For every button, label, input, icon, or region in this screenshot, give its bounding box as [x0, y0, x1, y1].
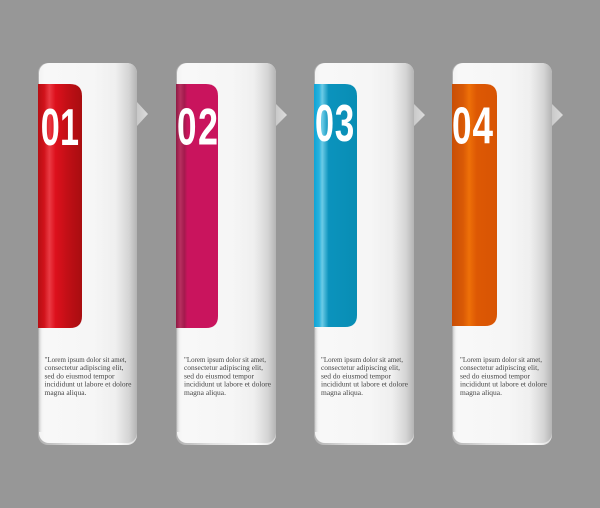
number: 01: 1 [60, 99, 79, 157]
text: step 02 [184, 355, 272, 397]
card: step 01 [38, 63, 137, 445]
ribbon: step 01 [38, 84, 82, 328]
text: step 02: incididunt ut labore et dolore [184, 380, 272, 388]
text: step 02: sed do eiusmod tempor [184, 372, 255, 380]
text: step 02: magna aliqua. [184, 388, 226, 397]
number: 02: 2 [198, 98, 218, 156]
card: step 02 [176, 63, 276, 445]
ribbon: step 04 [452, 84, 497, 326]
arrow: step 02 [275, 103, 287, 127]
text: step 03 [321, 355, 409, 397]
number: 04: 0 [452, 98, 472, 156]
number: 03: 3 [335, 95, 354, 153]
text: step 03: consectetur adipiscing elit, [321, 363, 400, 372]
panel: step 02 [176, 63, 287, 445]
text: step 04: "Lorem ipsum dolor sit amet, [460, 355, 542, 364]
text: step 01: consectetur adipiscing elit, [44, 363, 124, 372]
text: step 02: "Lorem ipsum dolor sit amet, [184, 355, 266, 364]
text: step 03: magna aliqua. [321, 388, 363, 397]
text: step 04: consectetur adipiscing elit, [460, 363, 539, 372]
text: step 04: sed do eiusmod tempor [460, 372, 531, 380]
arrow: step 03 [413, 103, 425, 127]
text: step 03: incididunt ut labore et dolore [321, 380, 409, 388]
text: step 01: magna aliqua. [44, 388, 87, 397]
text: step 01: sed do eiusmod tempor [44, 372, 115, 380]
text: step 04: magna aliqua. [460, 388, 502, 397]
text: step 01: incididunt ut labore et dolore [44, 380, 132, 388]
number: 04: 4 [472, 98, 493, 156]
text: step 01 [44, 355, 132, 397]
number: 01: 0 [41, 99, 60, 157]
text: step 04: incididunt ut labore et dolore [460, 380, 548, 388]
ribbon: step 02 [176, 84, 218, 328]
arrow: step 04 [551, 103, 563, 127]
text: step 03: sed do eiusmod tempor [321, 372, 392, 380]
text: step 03: "Lorem ipsum dolor sit amet, [321, 355, 403, 364]
panel: step 04 [452, 63, 563, 445]
arrow: step 01 [137, 102, 148, 126]
ribbon: step 03 [314, 84, 357, 327]
card: step 04 [452, 63, 552, 445]
text: step 04 [460, 355, 548, 397]
number: 03: 0 [315, 95, 334, 153]
text: step 02: consectetur adipiscing elit, [184, 363, 263, 372]
number: 02: 0 [177, 98, 196, 156]
panel: step 01 [38, 63, 148, 445]
text: step 01: "Lorem ipsum dolor sit amet, [44, 355, 127, 364]
card: step 03 [314, 63, 414, 445]
panel: step 03 [314, 63, 425, 445]
